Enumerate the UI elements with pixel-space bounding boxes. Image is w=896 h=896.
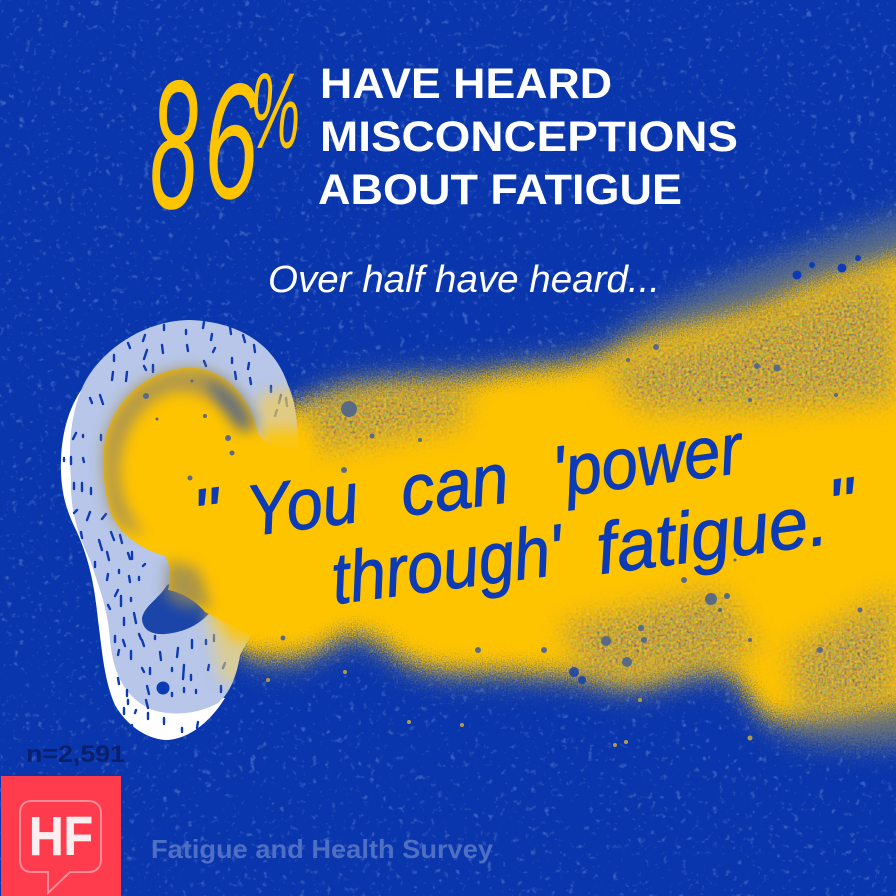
digit 6: 6 [204, 49, 258, 233]
spray grit on yellow [300, 265, 896, 720]
heading line 1: HAVE HEARD [320, 60, 612, 108]
opening quote mark: " [189, 473, 228, 556]
blue droplets in the haze [569, 255, 861, 684]
ear white backing [61, 386, 225, 740]
heading [318, 60, 738, 214]
word: fatigue.: fatigue. [592, 480, 832, 590]
yellow haze over the ear [205, 385, 305, 690]
word: through': through' [327, 510, 569, 620]
sample size: n=2,591 [26, 741, 125, 768]
gold droplets on the blue [266, 670, 752, 747]
heading line 2: MISCONCEPTIONS [320, 113, 738, 161]
inner ear shading [103, 368, 257, 535]
ear illustration [61, 320, 298, 740]
inner ear fill [103, 368, 310, 635]
ear canal [142, 575, 212, 634]
ear dash texture [64, 322, 287, 732]
soft blend at the ear lobe [210, 600, 262, 645]
paint splash haze [240, 190, 896, 745]
logo speech bubble [20, 801, 101, 893]
word: 'power: 'power [548, 408, 749, 513]
stat: 86% [150, 43, 300, 248]
subheading: Over half have heard... [268, 259, 660, 301]
heading line 3: ABOUT FATIGUE [318, 166, 682, 214]
digit 8: 8 [150, 43, 198, 248]
soft blend between strip and inner ear [262, 430, 310, 465]
ear outer [70, 320, 298, 713]
ear canal shading [165, 560, 212, 608]
inner ear dark top shading [205, 378, 255, 430]
ear dot [156, 682, 170, 694]
word: can: can [396, 438, 513, 532]
closing quote mark: " [824, 463, 863, 546]
survey name: Fatigue and Health Survey [151, 834, 494, 864]
handwritten quote [189, 408, 863, 620]
logo [1, 776, 121, 896]
yellow paint splash [217, 235, 896, 717]
droplets on inner ear [143, 380, 234, 480]
logo letters: HF [29, 805, 93, 867]
logo background [1, 776, 121, 896]
word: You: You [242, 458, 363, 552]
percent sign: % [250, 52, 300, 172]
spray droplets [257, 344, 862, 667]
